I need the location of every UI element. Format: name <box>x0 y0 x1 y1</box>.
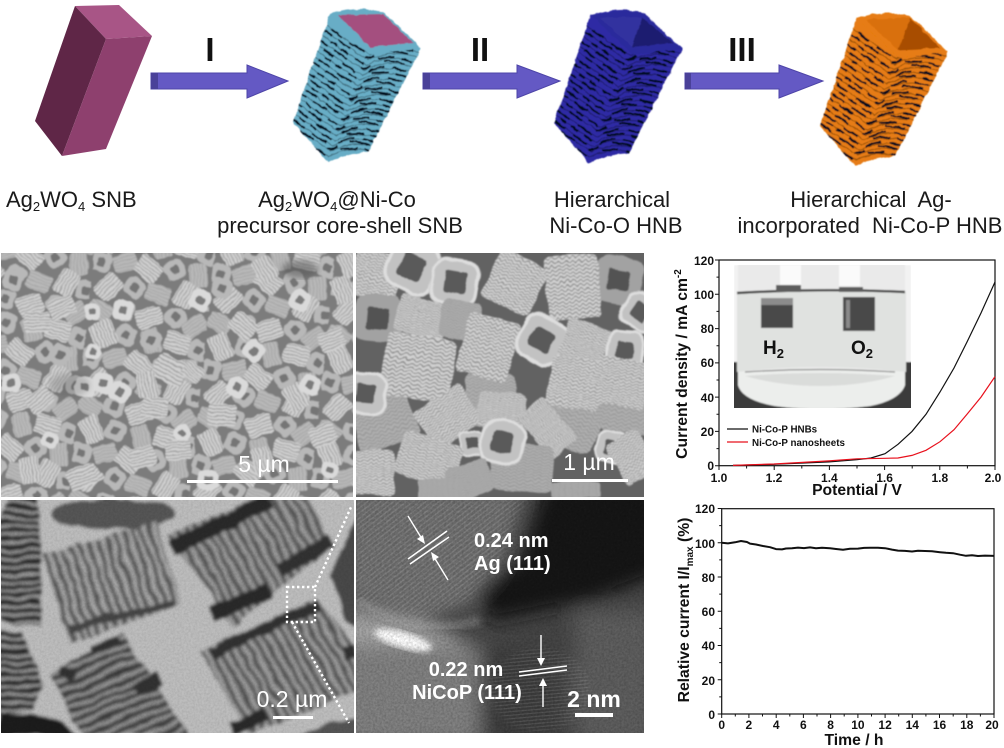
icon: Ag2WO4 solid nanobar prism <box>35 5 152 156</box>
y axis labels: 40 <box>702 639 715 653</box>
caption: Ag2WO4 SNB: Ag <box>6 187 33 212</box>
x axis title: Potential / V <box>812 482 902 499</box>
caption: core-shell SNB: Ag <box>258 187 416 214</box>
inset photo: water splitting electrolyzer <box>730 262 915 412</box>
panel: high magnification SEM <box>356 253 644 497</box>
x axis labels: 4 <box>773 718 780 732</box>
caption: core-shell SNB: 2 <box>285 199 292 214</box>
label I: I <box>205 31 215 68</box>
caption: Ni-Co-O HNB: Ni-Co-O HNB <box>549 213 683 238</box>
caption: Ni-Co-O HNB: Hierarchical <box>554 187 670 212</box>
y axis labels: 100 <box>695 537 715 551</box>
y axis labels: 60 <box>701 356 714 370</box>
x axis labels: 1.6 <box>876 471 893 485</box>
series: Ni-Co-P nanosheets <box>733 377 995 465</box>
label: O2: O <box>851 338 866 359</box>
label III: III <box>728 31 756 68</box>
icon: Ni-Co-O hollow nanobar, blue <box>546 10 683 163</box>
y axis labels: 80 <box>701 322 714 336</box>
icon: core-shell nanobar, teal layers with magenta core <box>284 9 422 162</box>
arrow I <box>151 65 288 98</box>
caption: Ag2WO4 SNB: 4 <box>78 199 85 214</box>
series: Ni-Co-P HNBs <box>733 282 995 465</box>
axes frame <box>722 509 994 714</box>
label: 0.24 nm Ag (111): 0.24 nm <box>474 530 548 552</box>
axis ticks <box>718 508 994 718</box>
y axis labels: 20 <box>701 425 714 439</box>
arrow II <box>423 65 560 98</box>
icon: Ag-incorporated Ni-Co-P hollow nanobar, orange <box>812 13 949 166</box>
caption: Ag2WO4 SNB: SNB <box>85 187 137 212</box>
caption: core-shell SNB: @Ni-Co <box>337 187 416 212</box>
scale bar: 2 nm <box>568 691 620 717</box>
y axis labels: 100 <box>694 288 714 302</box>
x axis labels: 2 <box>746 718 753 732</box>
y axis labels: 60 <box>702 605 715 619</box>
label: O2: 2 <box>866 346 873 361</box>
x axis labels: 1.2 <box>766 471 783 485</box>
dotted zoom box and guide lines <box>287 505 352 723</box>
label II: II <box>471 31 489 68</box>
y axis title: (%) <box>676 518 693 546</box>
x axis labels: 14 <box>906 718 919 732</box>
scale bar: 1 um: 1 µm <box>563 449 615 475</box>
scale bar: 0.2 um: 0.2 µm <box>257 686 327 712</box>
caption: Ag2WO4 SNB: 2 <box>33 199 40 214</box>
label: 0.22 nm NiCoP (111): NiCoP (111) <box>412 682 522 704</box>
scale bar: 1 um <box>552 454 628 482</box>
panel: TEM image <box>0 494 360 739</box>
caption: Ag2WO4 SNB: WO <box>40 187 78 212</box>
y axis title: Relative current I/I <box>676 566 693 702</box>
caption: core-shell SNB: 4 <box>330 199 337 214</box>
chart: polarization curves <box>673 254 1002 499</box>
caption: core-shell SNB: precursor core-shell SNB <box>217 213 463 238</box>
y axis title: -2 <box>673 269 684 278</box>
label: H2: H <box>763 338 777 359</box>
caption: Ni-Co-P HNB: Hierarchical Ag- <box>790 187 952 212</box>
y axis labels: 0 <box>708 708 715 722</box>
legend: Ni-Co-P HNBs <box>752 424 818 436</box>
y axis title: max <box>685 546 696 566</box>
x axis labels: 18 <box>960 718 974 732</box>
x axis labels: 0 <box>718 718 725 732</box>
scale bar: 5 um <box>187 456 338 483</box>
panel: HRTEM image <box>356 500 644 733</box>
label: 0.24 nm Ag (111): Ag (111) <box>474 553 551 575</box>
y axis labels: 120 <box>694 254 714 268</box>
y axis labels: 20 <box>702 674 715 688</box>
y axis labels: 80 <box>702 571 715 585</box>
x axis labels: 12 <box>878 718 892 732</box>
scale bar: 5 um: 5 µm <box>238 451 290 477</box>
x axis labels: 1.4 <box>821 471 838 485</box>
legend: Ni-Co-P nanosheets <box>752 438 845 449</box>
lattice marks: Ag (111) <box>408 516 449 580</box>
caption: core-shell SNB: WO <box>292 187 330 212</box>
caption: Ni-Co-P HNB: incorporated Ni-Co-P HNB <box>738 213 1002 238</box>
x axis labels: 8 <box>827 718 834 732</box>
legend <box>727 424 845 449</box>
lattice marks: NiCoP (111) <box>519 635 567 707</box>
axes frame <box>719 260 995 466</box>
arrow III <box>685 65 823 98</box>
x axis labels: 1.0 <box>711 471 728 485</box>
axis ticks <box>715 260 995 470</box>
x axis labels: 10 <box>851 718 865 732</box>
label: H2: 2 <box>777 346 784 361</box>
series: relative current <box>722 541 994 556</box>
y axis labels: 40 <box>701 391 714 405</box>
y axis labels: 120 <box>695 502 715 516</box>
scale bar: 0.2 um <box>258 691 326 719</box>
x axis labels: 2.0 <box>985 471 1002 485</box>
x axis labels: 16 <box>933 718 946 732</box>
chart: stability test <box>676 502 999 748</box>
x axis labels: 1.8 <box>931 471 948 485</box>
y axis labels: 0 <box>707 459 714 473</box>
panel: low magnification SEM <box>0 247 359 503</box>
y axis title: Current density / mA cm <box>674 278 691 459</box>
scale bar: 2 nm: 2 nm <box>567 686 621 712</box>
x axis labels: 6 <box>800 718 807 732</box>
x axis labels: 20 <box>985 718 999 732</box>
label: 0.22 nm NiCoP (111): 0.22 nm <box>429 659 503 681</box>
